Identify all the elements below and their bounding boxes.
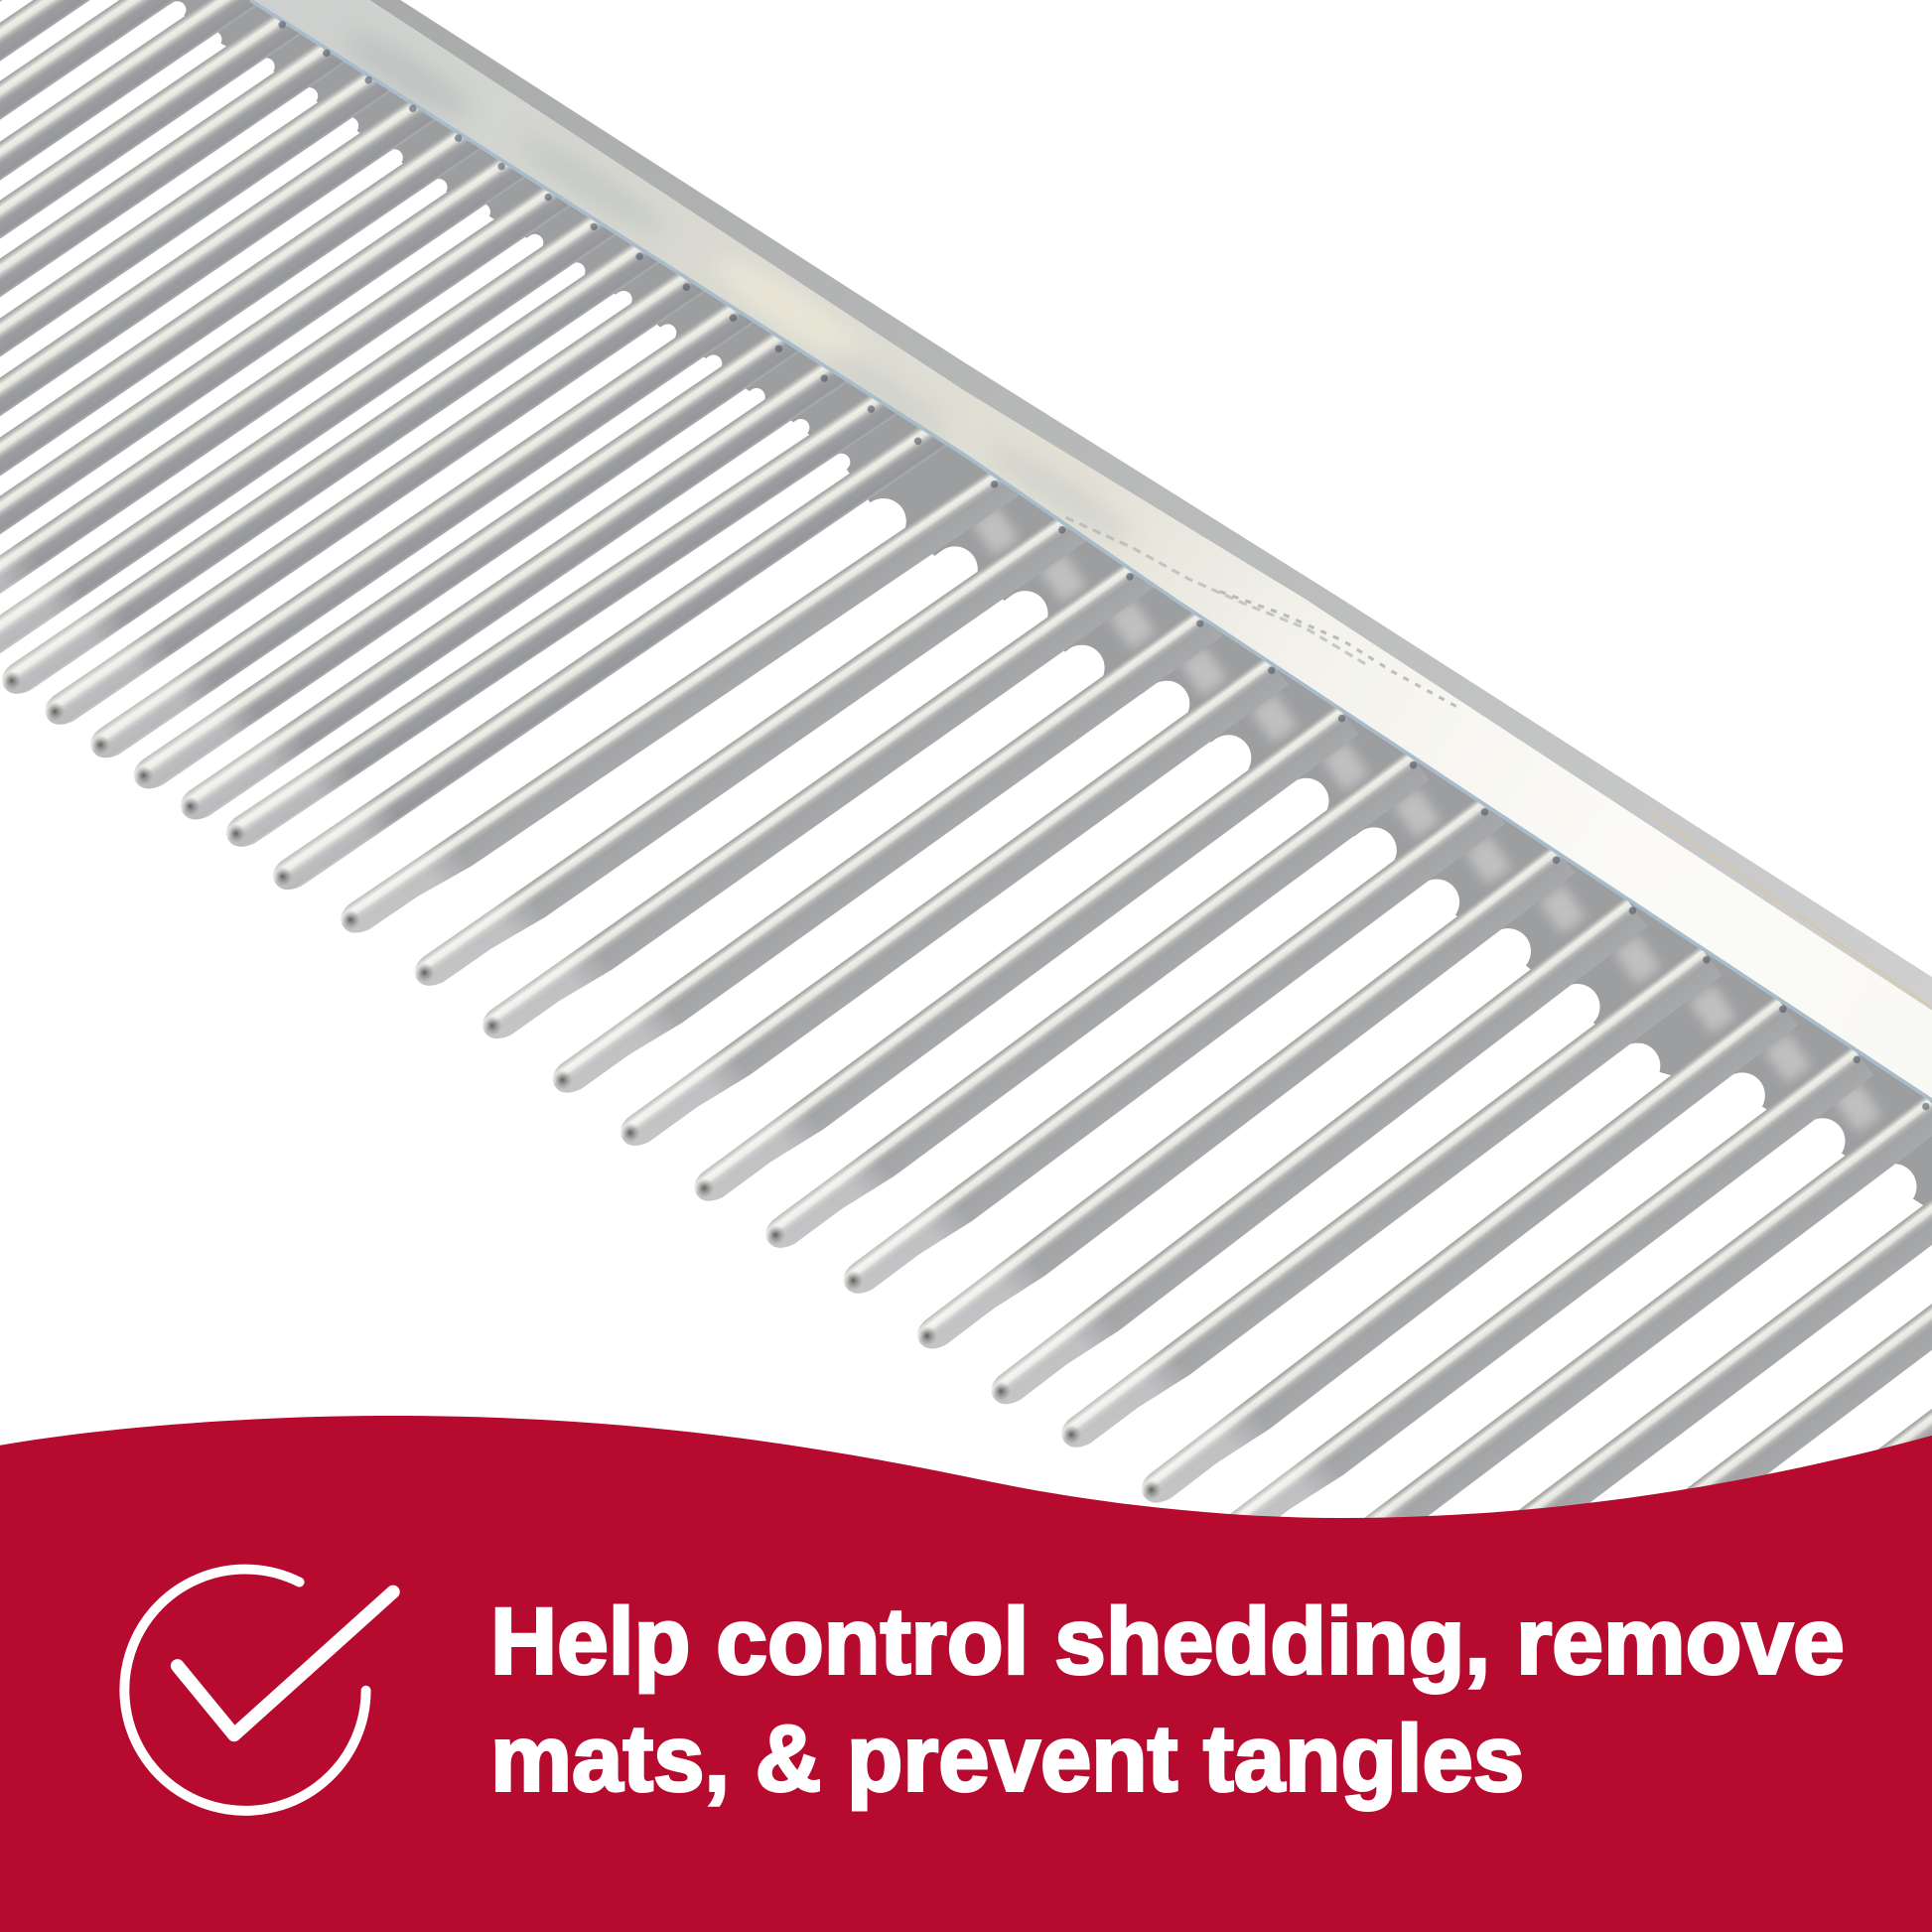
heading text: mats, & prevent tangles (490, 1706, 1524, 1810)
comb spine (250, 0, 1932, 1110)
panel: red wave banner (0, 1416, 1932, 1932)
icon: check mark in circle (124, 1570, 393, 1811)
heading text (490, 1588, 1845, 1810)
comb web behind the teeth (96, 0, 1932, 1392)
heading text: Help control shedding, remove (490, 1588, 1845, 1693)
